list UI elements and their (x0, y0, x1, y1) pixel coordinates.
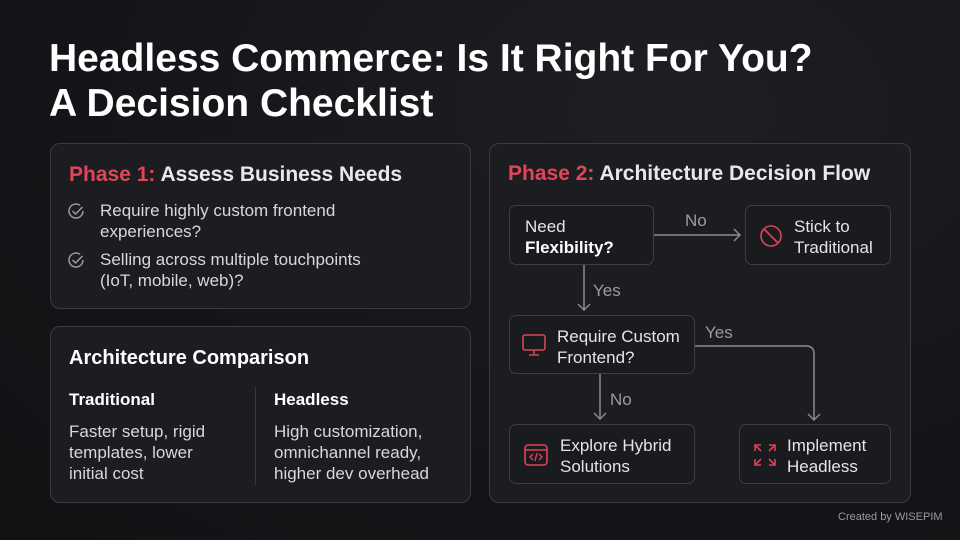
checklist item 1 (68, 201, 335, 241)
box: stick to traditional: Stick to (794, 217, 850, 236)
label: No 2: No (610, 390, 632, 409)
box: implement headless: Implement (787, 436, 866, 455)
column: traditional: templates, lower (69, 443, 193, 462)
panel: phase 2 (489, 143, 911, 503)
column: traditional: Traditional (69, 390, 155, 409)
label: No: No (685, 211, 707, 230)
column: headless: Headless (274, 390, 349, 409)
title: A Decision Checklist (49, 82, 433, 125)
checklist item 2: (IoT, mobile, web)? (100, 271, 244, 290)
box: require custom frontend: Require Custom (557, 327, 680, 346)
icon: ban (760, 225, 782, 247)
title: Headless Commerce: Is It Right For You? (49, 37, 813, 80)
phase 2 heading: Phase 2: Architecture Decision Flow (508, 162, 870, 185)
column: headless: higher dev overhead (274, 464, 429, 483)
checklist item 1: Require highly custom frontend (100, 201, 335, 220)
phase 1 heading: Phase 1: Assess Business Needs (69, 163, 402, 186)
box: implement headless (739, 424, 891, 484)
column: traditional (69, 390, 205, 483)
box: require custom frontend (509, 315, 695, 374)
column: traditional: Faster setup, rigid (69, 422, 205, 441)
column: traditional: initial cost (69, 464, 144, 483)
checklist item 2 (68, 250, 361, 290)
box: explore hybrid: Explore Hybrid (560, 436, 672, 455)
box: stick to traditional: Traditional (794, 238, 873, 257)
box: require custom frontend: Frontend? (557, 348, 634, 367)
box: need flexibility (509, 205, 654, 265)
footer credit: Created by WISEPIM (838, 511, 943, 523)
checklist item 2: Selling across multiple touchpoints (100, 250, 361, 269)
box: stick to traditional (745, 205, 891, 265)
icon: code window (524, 444, 548, 466)
column: headless: omnichannel ready, (274, 443, 421, 462)
label: Yes 2: Yes (705, 323, 733, 342)
column: headless (274, 390, 429, 483)
title (49, 37, 813, 125)
box: need flexibility: Flexibility? (525, 238, 614, 257)
panel: phase 1 (50, 143, 471, 309)
comparison heading: Architecture Comparison (69, 347, 309, 369)
icon: expand (754, 444, 776, 466)
column: headless: High customization, (274, 422, 422, 441)
panel: architecture comparison (50, 326, 471, 503)
box: explore hybrid: Solutions (560, 457, 630, 476)
box: implement headless: Headless (787, 457, 858, 476)
checklist item 1: experiences? (100, 222, 201, 241)
box: need flexibility: Need (525, 217, 566, 236)
box: explore hybrid (509, 424, 695, 484)
icon: monitor (522, 334, 546, 356)
label: Yes: Yes (593, 281, 621, 300)
